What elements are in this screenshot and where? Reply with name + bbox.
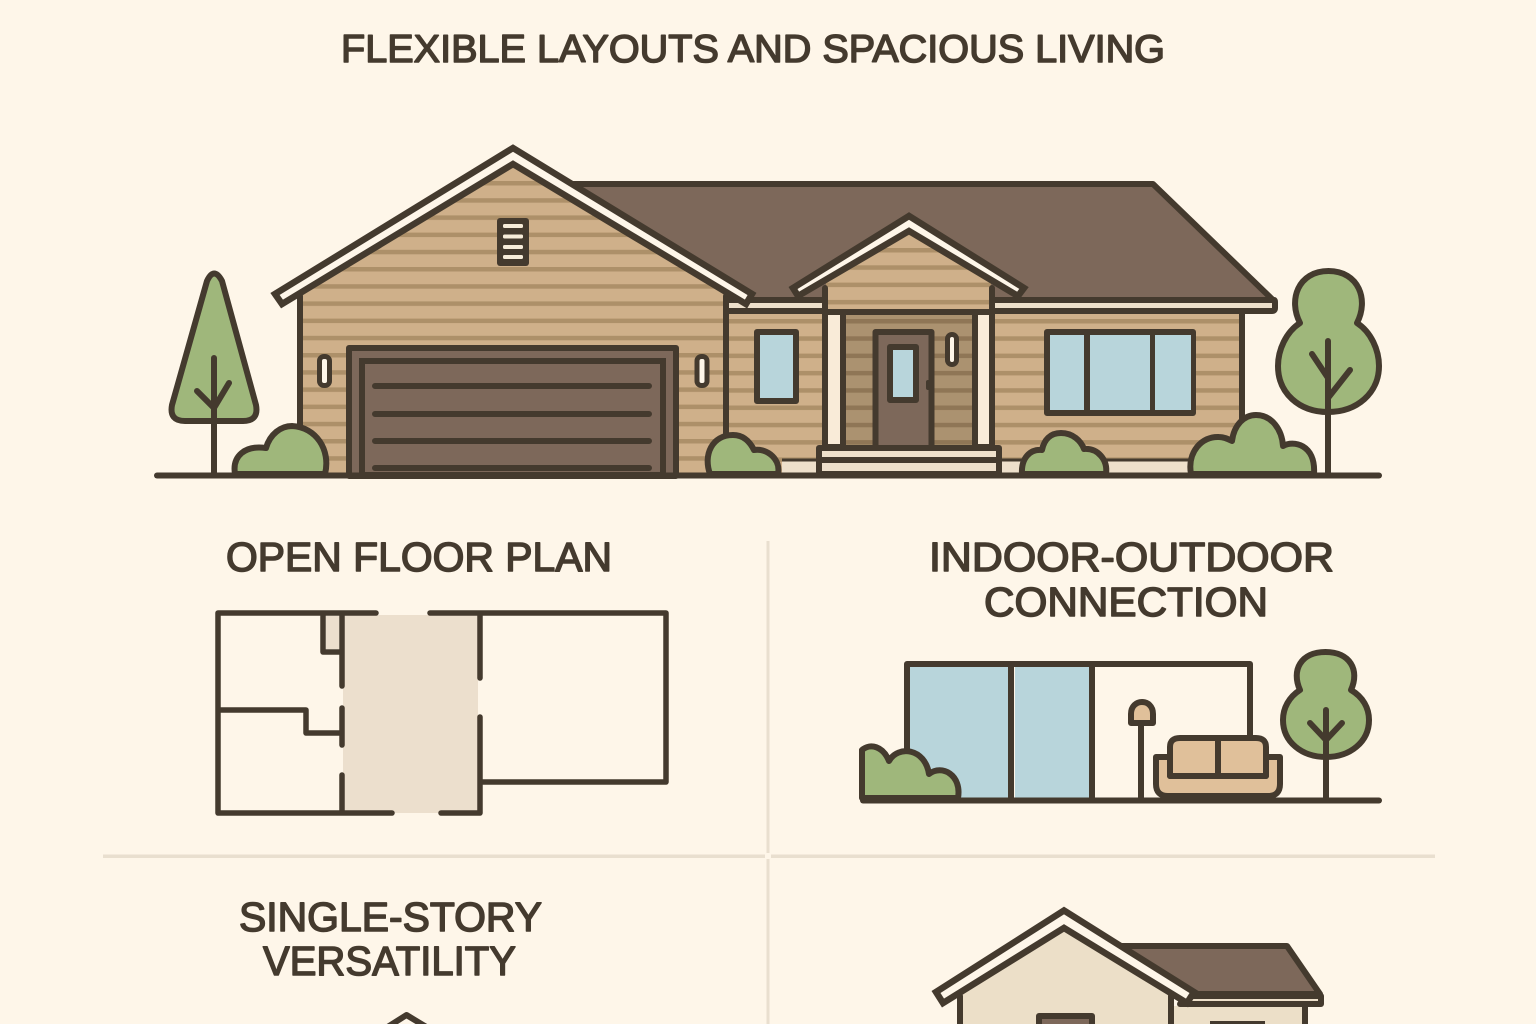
tree [1283,652,1369,800]
porch steps [819,448,999,474]
glass sliding doors [910,667,1089,798]
porch gable [793,216,1024,312]
main roof [570,184,1273,300]
ground line [157,472,1379,478]
closet fill [326,616,339,649]
garage wall lights [320,356,707,386]
heading: single-story versatility [239,894,542,984]
floor plan diagram [218,613,666,813]
front door [876,332,932,448]
side wing roof [1115,946,1320,994]
left window [757,332,796,401]
porch [825,312,992,448]
picture window [1047,332,1193,413]
floor lamp [1131,702,1153,800]
icon: roof peak of single-story house [386,1015,428,1024]
title: FLEXIBLE LAYOUTS AND SPACIOUS LIVING [341,28,1165,71]
shrub: porch right [1022,433,1106,474]
indoor-outdoor illustration [862,652,1379,800]
right wing wall with siding [725,311,1242,474]
main gable wall [961,928,1170,1024]
gable vent [497,218,529,266]
wall frame [907,664,1250,800]
heading: single-story versatility: VERSATILITY [263,938,516,984]
garage door [349,348,676,476]
window top [1210,1021,1265,1024]
shrub [862,746,959,798]
floor plan walls [218,613,666,813]
ground line [863,798,1379,804]
door top [1039,1016,1092,1024]
shrub: right corner [1190,415,1314,474]
porch columns [825,312,992,447]
open living area [343,615,478,813]
heading: indoor-outdoor connection: CONNECTION [984,579,1268,625]
gable fascia [936,910,1194,1003]
garage gable wall [302,164,725,474]
sofa [1156,738,1280,798]
dividers [103,541,1435,1024]
side wing wall [1172,1006,1304,1024]
heading: indoor-outdoor connection [929,534,1334,625]
heading: single-story versatility: SINGLE-STORY [239,894,542,940]
side wing fascia [1180,996,1321,1004]
heading: indoor-outdoor connection: INDOOR-OUTDOOR [929,534,1334,580]
porch light [948,334,956,364]
illustration: main ranch house [157,148,1379,476]
tree: round right [1278,271,1379,474]
illustration: small house [936,910,1321,1024]
tree: conifer left [172,274,256,474]
eave fascia [725,300,1275,311]
shrub: garage left [235,426,326,474]
heading: open floor plan: OPEN FLOOR PLAN [226,534,612,580]
garage gable fascia [275,148,752,304]
foundation strips [782,460,1190,473]
shrub: porch left [708,435,778,474]
